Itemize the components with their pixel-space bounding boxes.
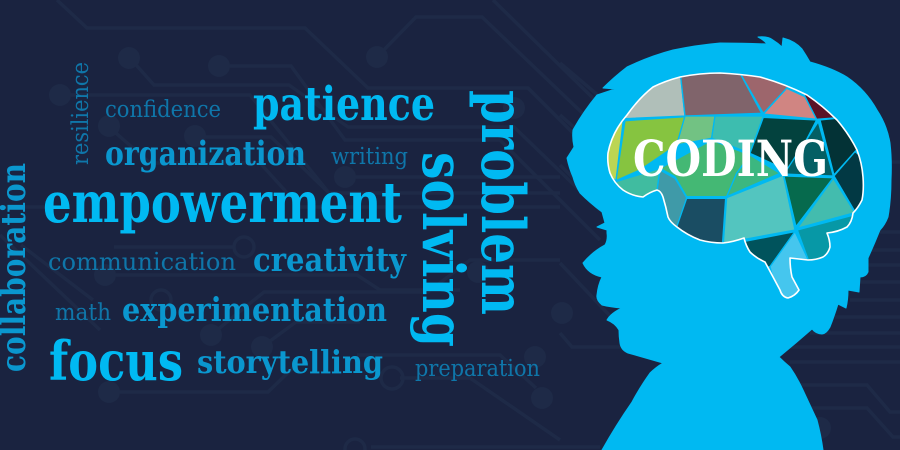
word: empowerment: empowerment bbox=[43, 170, 402, 236]
word: organization: organization bbox=[105, 134, 306, 174]
word: focus: focus bbox=[49, 329, 183, 393]
word: experimentation: experimentation bbox=[122, 290, 387, 329]
word: solving: solving bbox=[409, 152, 477, 347]
word: problem: problem bbox=[467, 90, 537, 315]
label: CODING: CODING bbox=[633, 129, 828, 188]
word: patience: patience bbox=[253, 77, 435, 132]
word: preparation: preparation bbox=[415, 356, 540, 382]
word: resilience: resilience bbox=[68, 62, 94, 165]
word: confidence: confidence bbox=[105, 97, 221, 123]
brain outline bbox=[608, 73, 863, 298]
word: writing: writing bbox=[331, 144, 408, 170]
word: math: math bbox=[55, 300, 111, 326]
brain bbox=[600, 70, 870, 307]
word: storytelling: storytelling bbox=[197, 343, 383, 381]
word: communication: communication bbox=[48, 248, 236, 276]
word: creativity: creativity bbox=[253, 240, 407, 279]
word cloud bbox=[0, 62, 540, 393]
brain mosaic bbox=[608, 74, 863, 298]
head silhouette bbox=[567, 37, 891, 450]
